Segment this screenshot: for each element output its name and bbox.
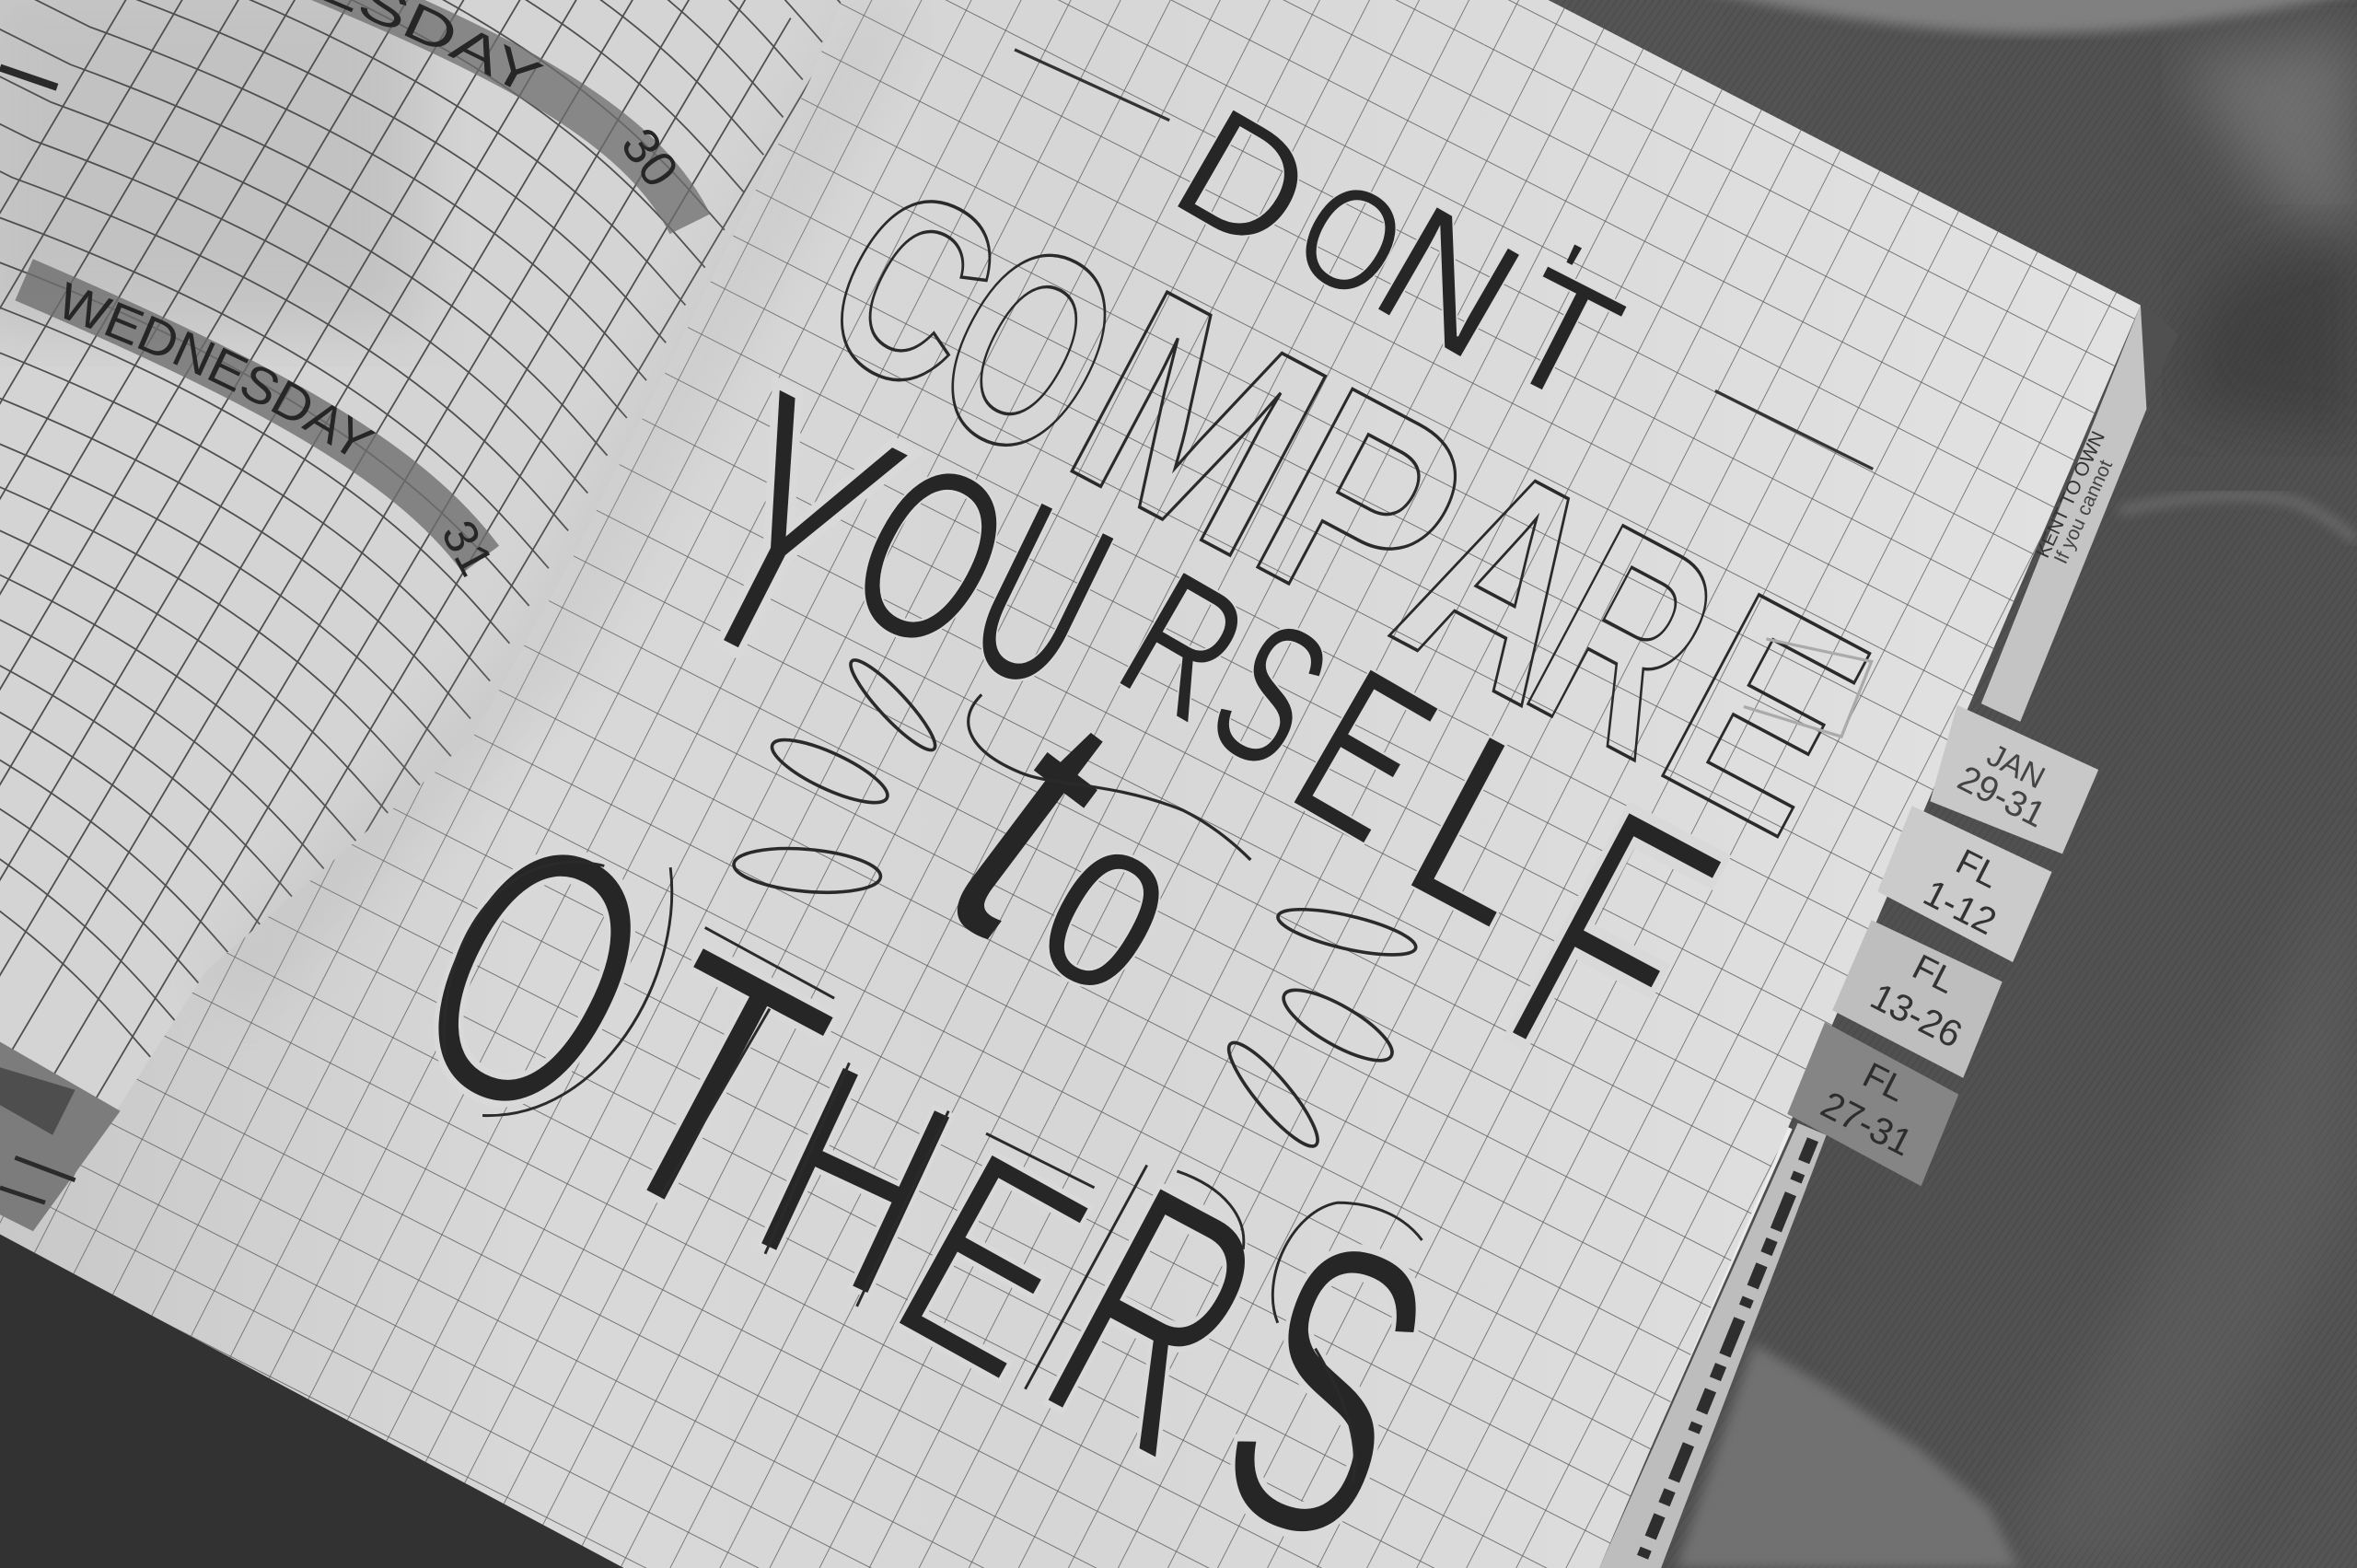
lettering: YOURSELF: L bbox=[1370, 681, 1600, 979]
lettering: OTHERS: R bbox=[994, 1109, 1318, 1533]
lettering: COMPARE: E bbox=[1620, 531, 1911, 897]
lettering: OTHERS: O bbox=[356, 748, 714, 1207]
tab: JAN 29-31 bbox=[1930, 705, 2098, 854]
tab: FL 27-31: FL bbox=[1856, 1055, 1912, 1109]
tab: FL 13-26 bbox=[1832, 920, 2003, 1078]
lettering: DON'T: D bbox=[1147, 72, 1341, 289]
notebook edge: light strip with small print bbox=[1981, 305, 2146, 722]
lettering: COMPARE: O bbox=[892, 178, 1166, 523]
lettering: COMPARE: A bbox=[1354, 395, 1654, 765]
pen mark, left page bbox=[0, 67, 57, 87]
lettering: YOURSELF bbox=[618, 307, 1772, 1163]
lettering: DON'T bbox=[1147, 72, 1646, 441]
tab: FL 1-12: FL bbox=[1950, 842, 2005, 897]
band: Wednesday heading: WEDNESDAY bbox=[64, 282, 376, 455]
lettering: YOURSELF: R bbox=[1089, 530, 1279, 761]
tab: FL 27-31 bbox=[1787, 1022, 1958, 1186]
lettering: OTHERS bbox=[356, 748, 1480, 1568]
decorative rule beside lettering bbox=[1715, 391, 1873, 469]
swash through t bbox=[969, 694, 1250, 860]
lettering: DON'T: O bbox=[1270, 145, 1432, 333]
lettering: DON'T: ' bbox=[1534, 225, 1595, 322]
notebook edge: light strip with small print: If you cannot bbox=[2050, 457, 2117, 567]
lettering: DON'T: T bbox=[1477, 233, 1646, 441]
pencil ghost letter bbox=[1744, 639, 1872, 737]
lettering: YOURSELF: S bbox=[1178, 575, 1363, 813]
lettering: COMPARE bbox=[784, 129, 1911, 897]
tab: FL 1-12: 1-12 bbox=[1917, 871, 2003, 943]
notebook edge: dark wedge bbox=[2112, 296, 2178, 413]
gutter shadow bbox=[226, 0, 887, 993]
lettering: OTHERS: T bbox=[546, 873, 878, 1303]
lettering: DON'T: N bbox=[1346, 167, 1551, 397]
tab: JAN 29-31: 29-31 bbox=[1951, 759, 2051, 836]
tab: FL 13-26: FL bbox=[1906, 947, 1961, 1002]
leaf ornaments bbox=[732, 652, 1420, 1156]
notebook edge: lower strip with dashes bbox=[1594, 1123, 1827, 1568]
tab: JAN 29-31: JAN bbox=[1981, 738, 2050, 796]
lettering: YOURSELF: E bbox=[1258, 621, 1471, 889]
lettering: COMPARE: M bbox=[1028, 227, 1371, 619]
lettering: YOURSELF: O bbox=[809, 403, 1051, 708]
lettering: COMPARE: P bbox=[1213, 326, 1512, 691]
tab: FL 13-26: 13-26 bbox=[1864, 975, 1968, 1056]
lettering: COMPARE: R bbox=[1488, 463, 1763, 817]
tab: FL 27-31: 27-31 bbox=[1815, 1083, 1920, 1164]
lettering: YOURSELF: Y bbox=[618, 307, 958, 758]
band: Wednesday heading bbox=[15, 259, 503, 585]
lettering: to: t bbox=[887, 644, 1182, 1002]
notebook edge: light strip with small print: KENT TO OWN bbox=[2032, 428, 2109, 562]
pasted photo fragment bbox=[0, 1042, 121, 1231]
band: Tuesday heading: 30 bbox=[610, 118, 690, 197]
tab: FL 1-12 bbox=[1877, 806, 2052, 962]
thin pen accents alongside OTHERS bbox=[444, 862, 1422, 1482]
lettering: COMPARE: C bbox=[784, 129, 1041, 450]
lettering: YOURSELF: F bbox=[1454, 727, 1772, 1163]
decorative rule above lettering bbox=[1015, 50, 1169, 121]
lettering: OTHERS: H bbox=[716, 1000, 994, 1359]
panel: left page curved grid bbox=[0, 0, 842, 1109]
band: Tuesday heading bbox=[311, 0, 710, 234]
lettering: YOURSELF: U bbox=[933, 449, 1148, 747]
band: Wednesday heading: 31 bbox=[431, 512, 503, 585]
lettering: to: o bbox=[996, 751, 1232, 1051]
lettering: OTHERS: E bbox=[852, 1090, 1132, 1439]
background: fabric bbox=[1504, 0, 2357, 1568]
